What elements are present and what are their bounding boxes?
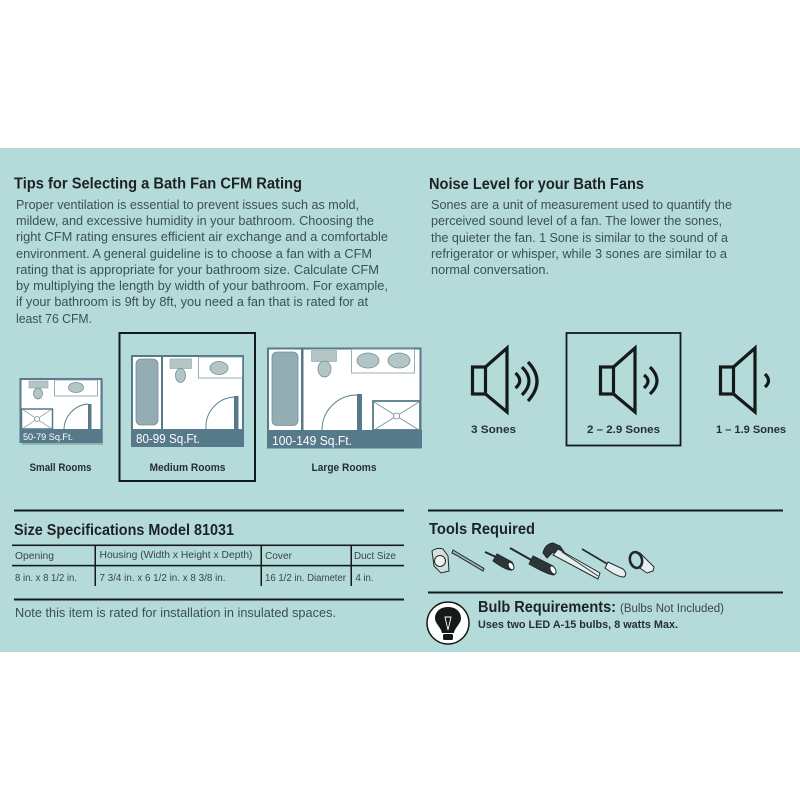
small room plan: 50-79 Sq.Ft. [23, 432, 73, 443]
icon: pencil [452, 550, 484, 571]
heading: noise level: Noise Level for your Bath Fans [429, 176, 644, 193]
icons: tools [432, 543, 654, 579]
label: large rooms: Large Rooms [312, 462, 376, 474]
label: 1 - 1.9 sones: 1 – 1.9 Sones [716, 424, 786, 436]
panel: tools required [428, 510, 783, 579]
text block: CFM tips [16, 197, 388, 326]
table: specifications: Duct Size [354, 551, 396, 562]
large room plan [267, 348, 422, 448]
panel: 1 - 1.9 sones [716, 348, 786, 436]
background band [0, 148, 800, 652]
text block: CFM tips: if your bathroom is 9ft by 8ft, you need a fan that is rated for at [16, 294, 368, 309]
text block: sones explanation: perceived sound level of a fan. The lower the sones, [431, 213, 722, 228]
table: specifications: 8 in. x 8 1/2 in. [15, 573, 77, 584]
panel: bulb requirements [427, 592, 783, 644]
panel: small room [20, 379, 103, 474]
heading: tools required: Tools Required [429, 521, 535, 538]
large room plan: 100-149 Sq.Ft. [272, 433, 352, 448]
highlight frame [120, 333, 255, 481]
text block: sones explanation: normal conversation. [431, 262, 549, 277]
label: small rooms: Small Rooms [30, 462, 92, 474]
table: specifications: 4 in. [356, 573, 374, 584]
text block: sones explanation [431, 197, 732, 277]
text block: CFM tips: right CFM rating ensures efficient air exchange and a comfortable [16, 229, 388, 244]
text block: CFM tips: Proper ventilation is essential to prevent issues such as mold, [16, 197, 359, 212]
text block: sones explanation: the quieter the fan. 1 Sone is similar to the sound of a [431, 230, 729, 245]
text block: sones explanation: Sones are a unit of measurement used to quantify the [431, 197, 732, 212]
icon: speaker with three waves [472, 348, 537, 412]
text block: CFM tips: least 76 CFM. [16, 311, 92, 326]
icon: large screwdriver [510, 548, 557, 575]
medium room plan [131, 356, 244, 447]
icon: hammer [543, 543, 600, 579]
label: 2 - 2.9 sones: 2 – 2.9 Sones [587, 424, 660, 436]
table: specifications: Cover [265, 551, 293, 562]
label: 3 sones: 3 Sones [471, 424, 516, 436]
heading: bulb requirements [478, 599, 724, 616]
text block: sones explanation: refrigerator or whisper, while 3 sones are similar to a [431, 246, 728, 261]
note: insulated spaces: Note this item is rated for installation in insulated spaces. [15, 606, 336, 620]
heading: bulb requirements: Bulb Requirements: [478, 599, 616, 616]
icon: electrical tape [628, 551, 654, 573]
panel: medium room (highlighted) [120, 333, 255, 481]
icon: tape measure [432, 548, 449, 573]
text block: CFM tips: by multiplying the length by width of your bathroom. For example, [16, 278, 388, 293]
table: specifications: Opening [15, 551, 54, 562]
text block: CFM tips: mildew, and excessive humidity in your bathroom. Choosing the [16, 213, 374, 228]
highlight frame [566, 333, 680, 446]
heading: tips for selecting CFM: Tips for Selecting a Bath Fan CFM Rating [14, 176, 302, 192]
icon: light bulb [427, 602, 469, 644]
heading: size specifications: Size Specifications Model 81031 [14, 522, 234, 539]
panel: size specifications [12, 510, 404, 620]
text block: CFM tips: environment. A general guideline is to choose a fan with a CFM [16, 246, 372, 261]
table: specifications: Housing (Width x Height x Depth) [100, 550, 252, 561]
text block: CFM tips: rating that is appropriate for your bathroom size. Calculate CFM [16, 262, 379, 277]
icon: awl [582, 549, 626, 577]
icon: speaker with two waves [600, 348, 657, 412]
table: specifications [12, 544, 404, 586]
icon: speaker with one wave [720, 348, 768, 412]
panel: 3 sones [471, 348, 537, 436]
table: specifications: 16 1/2 in. Diameter [265, 573, 347, 584]
panel: 2 - 2.9 sones (highlighted) [566, 333, 680, 446]
table: specifications: 7 3/4 in. x 6 1/2 in. x 8 3/8 in. [100, 573, 226, 584]
heading: bulb requirements: (Bulbs Not Included) [620, 603, 724, 615]
label: medium rooms: Medium Rooms [150, 462, 226, 474]
medium room plan: 80-99 Sq.Ft. [136, 432, 200, 446]
text: bulb details: Uses two LED A-15 bulbs, 8 watts Max. [478, 619, 678, 631]
icon: small screwdriver [485, 552, 515, 571]
panel: large room [267, 348, 422, 474]
